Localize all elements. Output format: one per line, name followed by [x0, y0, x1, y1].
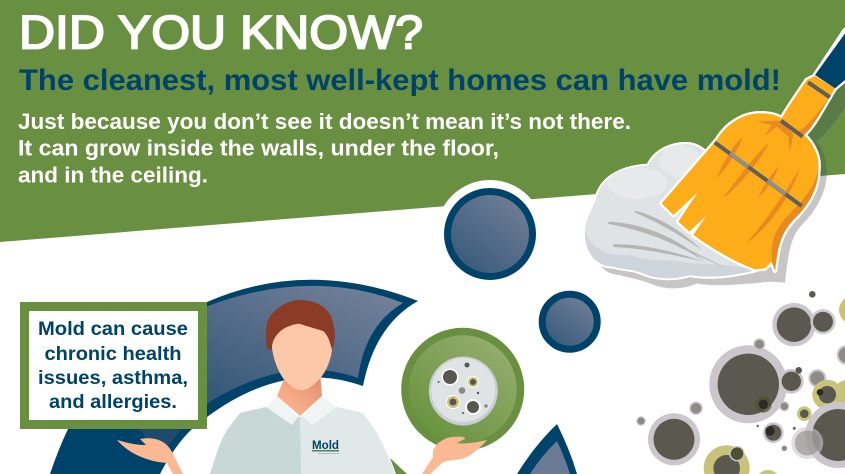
text box: health issues: issues, asthma, — [38, 368, 188, 389]
text box: health issues: and allergies. — [49, 392, 177, 413]
green banner — [0, 0, 845, 242]
text box: health issues: Mold can cause — [38, 319, 188, 340]
arch panel: lower left — [50, 429, 192, 474]
shirt — [210, 407, 395, 474]
text box: health issues — [24, 306, 202, 424]
hair — [266, 300, 335, 350]
circle: small navy bubble — [542, 294, 597, 349]
text box: health issues: chronic health — [44, 344, 182, 365]
shirt logo: Mold — [312, 438, 339, 452]
mold spores — [636, 291, 845, 474]
body text: and in the ceiling. — [18, 162, 208, 187]
right hand — [422, 437, 487, 474]
body text: Just because you don’t see it doesn’t mean it’s not there. — [18, 109, 631, 134]
title: DID YOU KNOW? — [19, 6, 423, 58]
subtitle: The cleanest, most well-kept homes can have mold! — [19, 64, 781, 97]
person — [117, 300, 487, 474]
circle: large navy bubble — [436, 180, 544, 288]
arch panel: lower right — [517, 424, 577, 474]
face — [272, 324, 332, 390]
neck — [277, 372, 322, 416]
icon: broom and dust cloud — [585, 30, 845, 288]
arch panel: top — [200, 280, 418, 417]
body text: It can grow inside the walls, under the floor, — [18, 136, 499, 161]
collar — [266, 396, 337, 425]
green accent behind shirt — [390, 458, 407, 474]
left hand — [117, 438, 183, 474]
icon: mold petri dish — [401, 328, 524, 451]
body text — [18, 109, 631, 187]
